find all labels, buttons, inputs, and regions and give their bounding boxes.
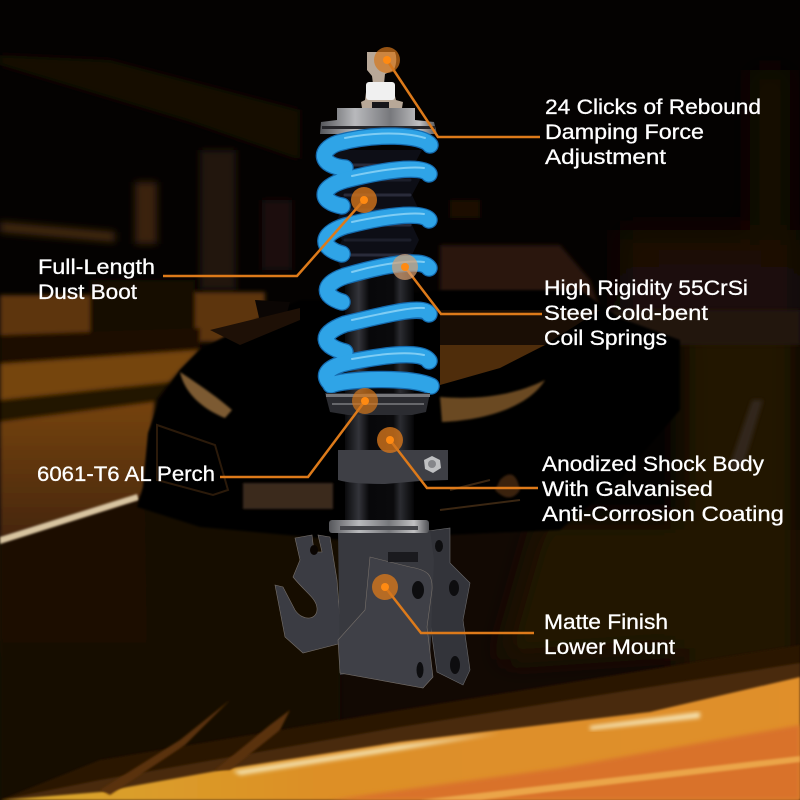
callout: coil springs: Coil Springs	[544, 327, 667, 350]
callout: coil springs	[392, 254, 748, 350]
callout: AL perch	[37, 388, 378, 486]
lower mount	[275, 528, 470, 688]
callout: coil springs: Steel Cold-bent	[544, 302, 708, 325]
callout: dust boot: Full-Length	[38, 256, 155, 279]
threaded shaft	[345, 270, 414, 526]
callout: dust boot: Dust Boot	[38, 281, 137, 304]
callout: lower mount	[372, 574, 675, 659]
callout: 24 clicks of rebound: Damping Force	[545, 121, 704, 144]
shock body clamp with bolt	[338, 450, 448, 484]
callout: coil springs: High Rigidity 55CrSi	[544, 277, 748, 300]
orange light streaks at bottom	[0, 645, 800, 800]
callout: AL perch: 6061-T6 AL Perch	[37, 463, 215, 486]
callout: anodized shock body	[377, 427, 784, 526]
callout: 24 clicks of rebound	[374, 47, 761, 169]
callout: anodized shock body: Anodized Shock Body	[542, 453, 765, 476]
top mount and adjuster knob	[320, 52, 437, 134]
blue coil spring	[324, 134, 431, 386]
aluminium perch	[325, 393, 430, 415]
car silhouette	[137, 290, 680, 540]
callout: lower mount: Matte Finish	[544, 611, 668, 634]
callout: dust boot	[38, 187, 377, 304]
callout: anodized shock body: With Galvanised	[542, 478, 713, 501]
callout: 24 clicks of rebound: Adjustment	[545, 146, 666, 169]
callout: anodized shock body: Anti-Corrosion Coating	[542, 503, 784, 526]
callout: 24 clicks of rebound: 24 Clicks of Rebound	[545, 96, 761, 119]
callout: lower mount: Lower Mount	[544, 636, 675, 659]
dust boot	[333, 150, 422, 270]
coilover shock absorber	[275, 52, 470, 688]
lower collar	[329, 520, 429, 533]
